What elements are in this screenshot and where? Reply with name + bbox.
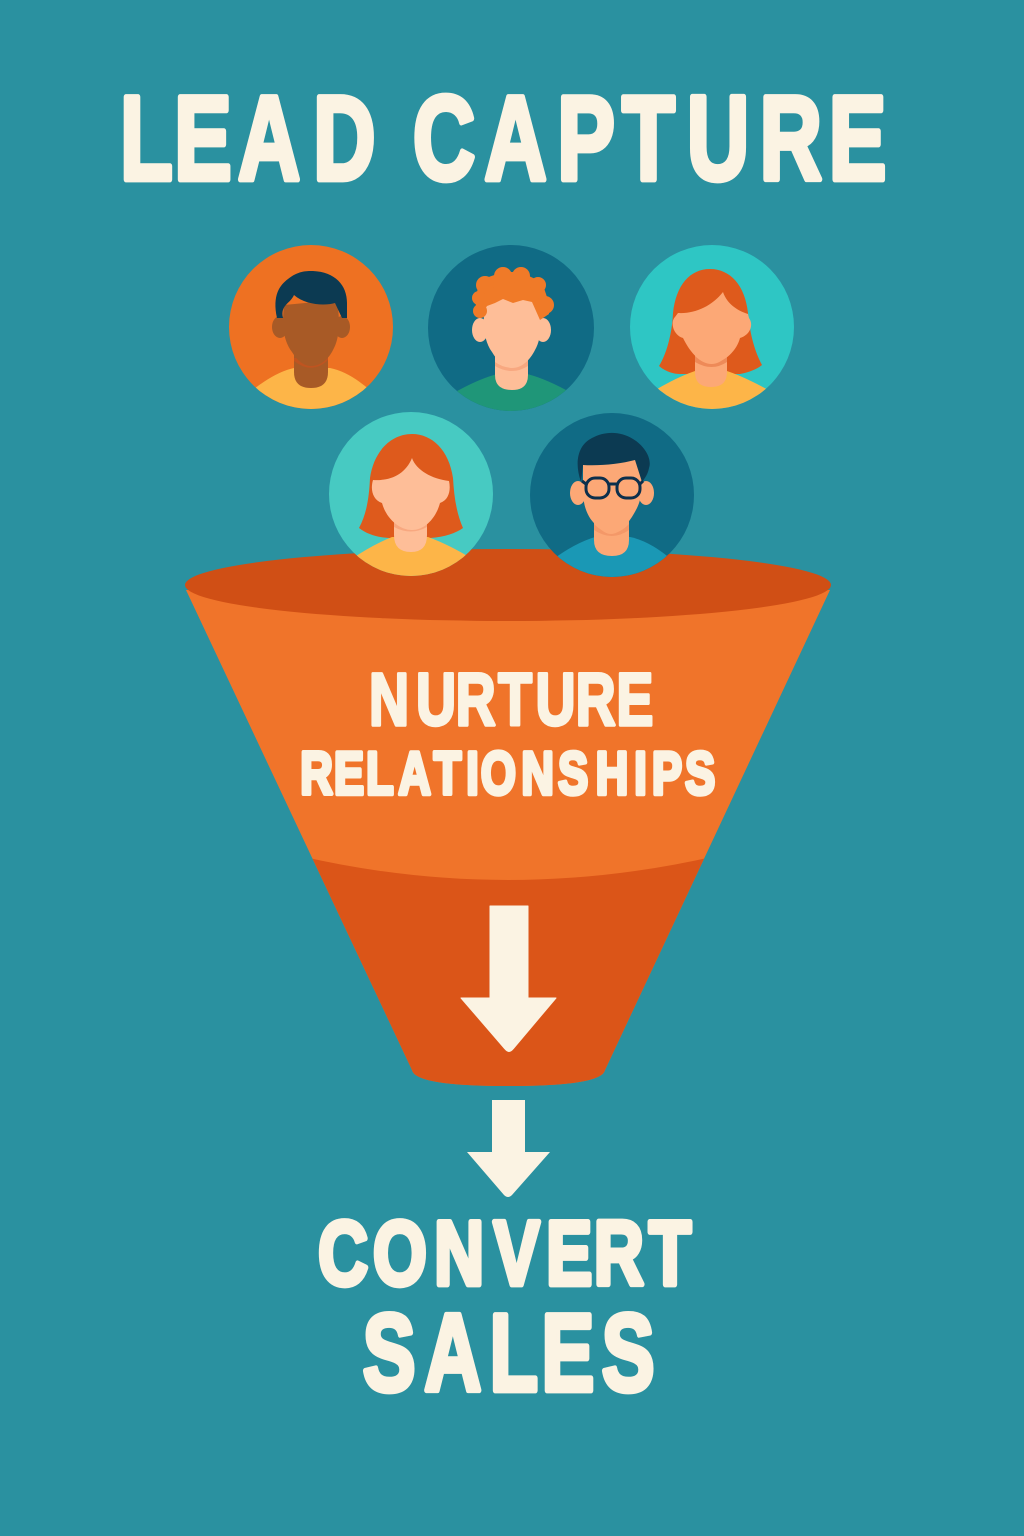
funnel label: nurture relationships: RELATIONSHIPS xyxy=(300,741,715,808)
funnel lower section xyxy=(312,858,704,1086)
ears xyxy=(472,318,486,342)
shirt xyxy=(658,371,766,409)
title: LEAD CAPTURE xyxy=(120,72,886,206)
arrow below funnel xyxy=(467,1100,550,1197)
neck xyxy=(294,355,328,388)
avatar: man with glasses xyxy=(530,413,694,590)
shirt xyxy=(256,368,366,409)
funnel label: nurture relationships: NURTURE xyxy=(369,658,653,741)
hair xyxy=(359,434,463,538)
hair xyxy=(659,269,762,374)
ears xyxy=(272,316,285,338)
hair xyxy=(578,433,650,482)
conversion label: SALES xyxy=(363,1292,655,1415)
arrow inside funnel xyxy=(461,906,556,1052)
face with ears and fringe xyxy=(673,292,751,363)
avatar: woman with orange hair, left xyxy=(329,412,493,590)
shirt xyxy=(357,537,466,576)
neck xyxy=(394,527,427,552)
face xyxy=(283,300,339,366)
ears xyxy=(570,481,584,505)
avatar: man with curly orange hair xyxy=(428,245,594,420)
curly hair xyxy=(472,267,554,320)
face xyxy=(484,295,541,368)
hair xyxy=(275,271,347,318)
shirt xyxy=(558,537,667,577)
avatar: man with dark hair xyxy=(229,245,393,420)
conversion label xyxy=(318,1203,691,1415)
glasses xyxy=(582,478,643,498)
funnel upper body xyxy=(186,590,830,1086)
funnel label: nurture relationships xyxy=(300,658,715,808)
funnel xyxy=(185,549,831,1100)
infographic canvas xyxy=(124,92,886,1394)
funnel rim xyxy=(185,549,831,621)
face with ears and fringe xyxy=(372,458,450,530)
neck xyxy=(495,356,528,390)
face xyxy=(583,455,642,534)
shirt xyxy=(457,374,566,411)
neck xyxy=(695,356,727,387)
conversion label: CONVERT xyxy=(318,1203,691,1305)
neck xyxy=(594,521,629,556)
avatar: woman with orange hair, right xyxy=(630,245,794,420)
